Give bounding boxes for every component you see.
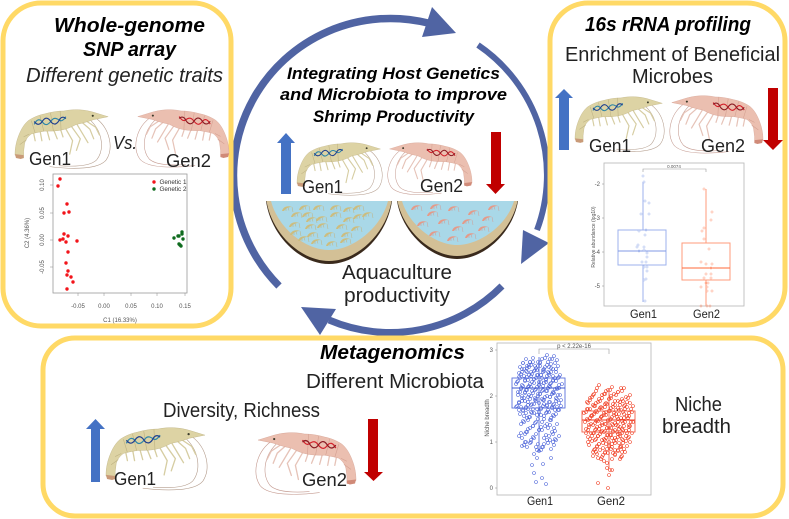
chart: PCA scatter plot: 0.10 — [151, 304, 163, 310]
chart: relative abundance box plot: -4 — [595, 250, 601, 256]
icon: shrimp Gen2 — [388, 143, 472, 195]
icon: shrimp Gen2 — [256, 433, 356, 494]
label: chart Gen2: Gen2 — [597, 494, 625, 508]
panel: whole-genome SNP array — [3, 3, 231, 326]
label: Gen1: Gen1 — [302, 177, 343, 197]
chart: niche breadth box plot: 2 — [490, 394, 494, 400]
chart: PCA scatter plot: Genetic 1 — [160, 179, 187, 186]
chart: PCA scatter plot: 0.00 — [98, 304, 110, 310]
label: Gen2: Gen2 — [166, 151, 211, 171]
chart: niche breadth box plot: 0 — [490, 486, 494, 492]
label: Gen2: Gen2 — [302, 470, 347, 490]
pond: Gen1 high density — [266, 201, 392, 264]
heading: integrating host genetics and microbiota: and Microbiota to improve — [280, 86, 507, 104]
chart: relative abundance box plot — [591, 163, 744, 306]
arrow: blue up — [555, 89, 573, 150]
chart: PCA scatter plot: 0.10 — [40, 179, 46, 191]
icon: shrimp Gen1 — [575, 97, 664, 152]
label: Gen2: Gen2 — [701, 136, 745, 156]
chart: relative abundance box plot: -5 — [595, 284, 601, 290]
chart: niche breadth box plot: Niche breadth — [485, 399, 491, 437]
icon: shrimp Gen2 — [136, 110, 229, 167]
chart: niche breadth box plot — [485, 343, 651, 495]
chart: niche breadth box plot: 1 — [490, 440, 494, 446]
heading: metagenomics: Metagenomics — [320, 342, 465, 364]
chart: relative abundance box plot: 0.0074 — [667, 164, 681, 169]
text: niche breadth: Niche — [675, 394, 722, 416]
text: different microbiota: Different Microbiota — [306, 371, 485, 393]
chart: niche breadth box plot: p < 2.22e-16 — [557, 344, 592, 350]
arrow: blue up — [86, 419, 105, 482]
text: enrichment of beneficial microbes — [565, 44, 780, 88]
chart: PCA scatter plot: 0.05 — [125, 304, 137, 310]
chart: niche breadth box plot: 3 — [490, 348, 494, 354]
chart: PCA scatter plot: -0.05 — [71, 304, 85, 310]
arrow: red down — [763, 88, 783, 150]
arrow: host genetics to productivity — [233, 7, 456, 286]
icon: shrimp Gen1 — [297, 143, 382, 195]
arrow: blue up — [277, 133, 295, 194]
circular arrows — [233, 7, 549, 335]
heading: integrating host genetics and microbiota — [280, 65, 507, 126]
arrow: productivity to microbes — [478, 45, 549, 264]
chart: PCA scatter plot: Genetic 2 — [160, 186, 187, 193]
text: niche breadth — [662, 394, 731, 438]
panel: metagenomics — [43, 338, 783, 516]
chart: PCA scatter plot: -0.05 — [40, 260, 46, 274]
heading: whole-genome SNP array: Whole-genome — [54, 15, 205, 37]
label: Gen2: Gen2 — [420, 176, 463, 196]
label: Vs.: Vs. — [113, 133, 137, 153]
chart: PCA scatter plot: 0.05 — [40, 207, 46, 219]
arrow: microbes to metagenomics — [301, 286, 502, 335]
arrow: red down — [364, 419, 383, 481]
panel: central aquaculture productivity — [266, 65, 518, 307]
text: aquaculture productivity: Aquaculture — [342, 262, 452, 284]
text: aquaculture productivity — [342, 262, 452, 307]
chart: PCA scatter plot: C2 (4.36%) — [25, 218, 31, 248]
chart: relative abundance box plot: Relative abundance (log10) — [591, 206, 597, 268]
panel: 16s rRNA profiling — [550, 3, 785, 325]
text: diversity, richness: Diversity, Richness — [163, 400, 320, 422]
label: chart Gen2: Gen2 — [693, 307, 720, 321]
text: enrichment of beneficial microbes: Microbes — [632, 66, 713, 88]
arrow: red down — [486, 132, 505, 194]
chart: PCA scatter plot: 0.00 — [40, 234, 46, 246]
icon: shrimp Gen1 — [15, 110, 110, 168]
chart: relative abundance box plot: -3 — [595, 216, 601, 222]
chart: PCA scatter plot: 0.15 — [179, 304, 191, 310]
icon: shrimp Gen1 — [106, 428, 207, 490]
heading: integrating host genetics and microbiota: Shrimp Productivity — [313, 108, 475, 126]
label: Gen1: Gen1 — [589, 136, 631, 156]
pond: Gen2 low density — [397, 201, 518, 259]
heading: whole-genome SNP array: SNP array — [83, 39, 177, 61]
label: Gen1: Gen1 — [29, 149, 71, 169]
chart: PCA scatter plot — [25, 174, 191, 324]
text: niche breadth: breadth — [662, 416, 731, 438]
chart: PCA scatter plot: C1 (16.33%) — [103, 318, 137, 324]
label: chart Gen1: Gen1 — [527, 494, 553, 508]
heading: whole-genome SNP array — [54, 15, 205, 61]
label: chart Gen1: Gen1 — [630, 307, 657, 321]
text: enrichment of beneficial microbes: Enrichment of Beneficial — [565, 44, 780, 66]
text: aquaculture productivity: productivity — [344, 285, 450, 307]
chart: relative abundance box plot: -2 — [595, 182, 601, 188]
heading: 16s rRNA profiling: 16s rRNA profiling — [585, 14, 751, 36]
label: Gen1: Gen1 — [114, 469, 156, 489]
heading: integrating host genetics and microbiota: Integrating Host Genetics — [287, 65, 500, 83]
icon: shrimp Gen2 — [670, 96, 763, 153]
text: different genetic traits: Different genetic traits — [26, 65, 223, 87]
